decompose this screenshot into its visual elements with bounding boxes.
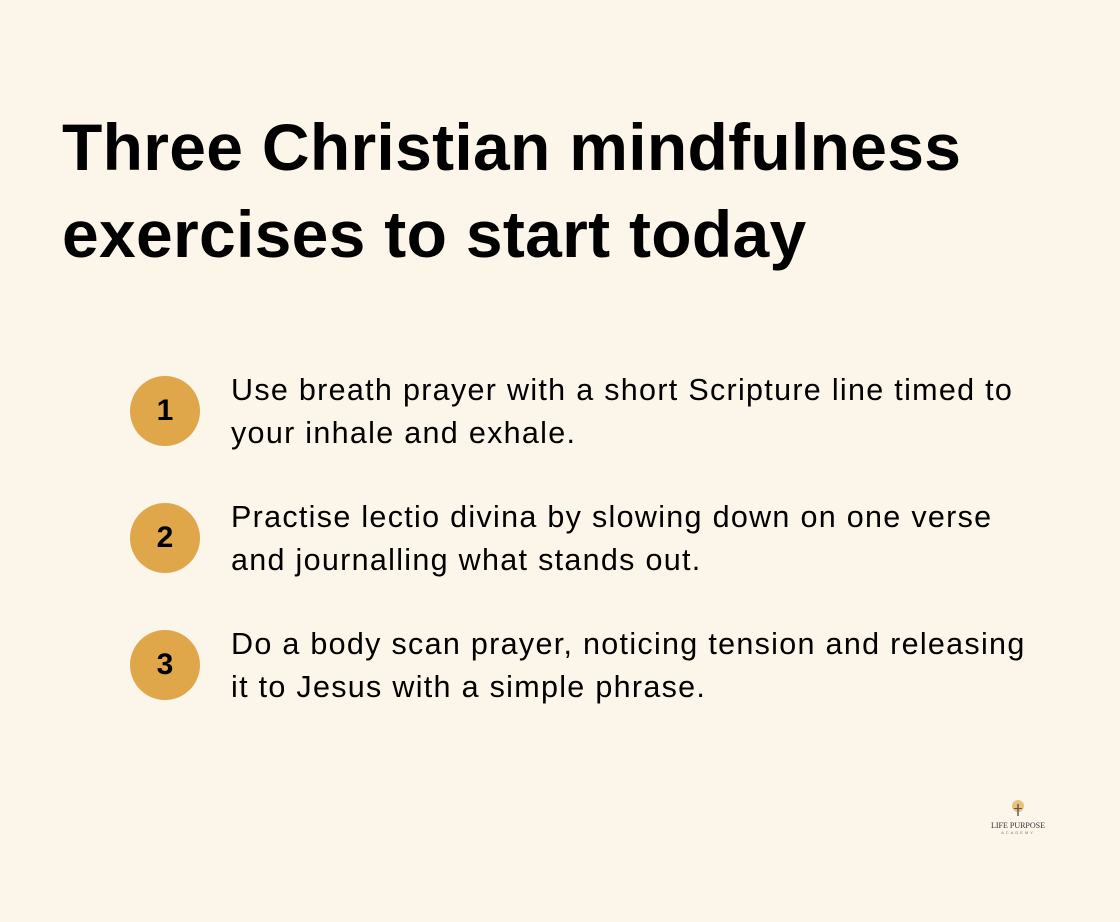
title: Three Christian mindfulness	[62, 110, 961, 184]
logo	[991, 800, 1045, 835]
title	[62, 110, 961, 271]
logo: LIFE PURPOSE	[991, 821, 1045, 830]
number badge 3: 3	[157, 648, 173, 681]
item 3	[130, 627, 1026, 704]
text 1: your inhale and exhale.	[231, 416, 576, 450]
icon: tree	[1012, 800, 1024, 816]
text 1	[231, 373, 1013, 450]
text 3: it to Jesus with a simple phrase.	[231, 670, 706, 704]
number badge 1	[130, 376, 200, 446]
text 1: Use breath prayer with a short Scripture line timed to	[231, 373, 1013, 407]
item 2	[130, 500, 992, 577]
title: exercises to start today	[62, 197, 807, 271]
text 2: Practise lectio divina by slowing down on one verse	[231, 500, 992, 534]
text 2: and journalling what stands out.	[231, 543, 702, 577]
text 3: Do a body scan prayer, noticing tension and releasing	[231, 627, 1026, 661]
text 2	[231, 500, 992, 577]
number badge 2	[130, 503, 200, 573]
number badge 2: 2	[157, 521, 173, 554]
item 1	[130, 373, 1013, 450]
number badge 3	[130, 630, 200, 700]
text 3	[231, 627, 1026, 704]
number badge 1: 1	[157, 394, 173, 427]
logo: ACADEMY	[1001, 830, 1035, 835]
